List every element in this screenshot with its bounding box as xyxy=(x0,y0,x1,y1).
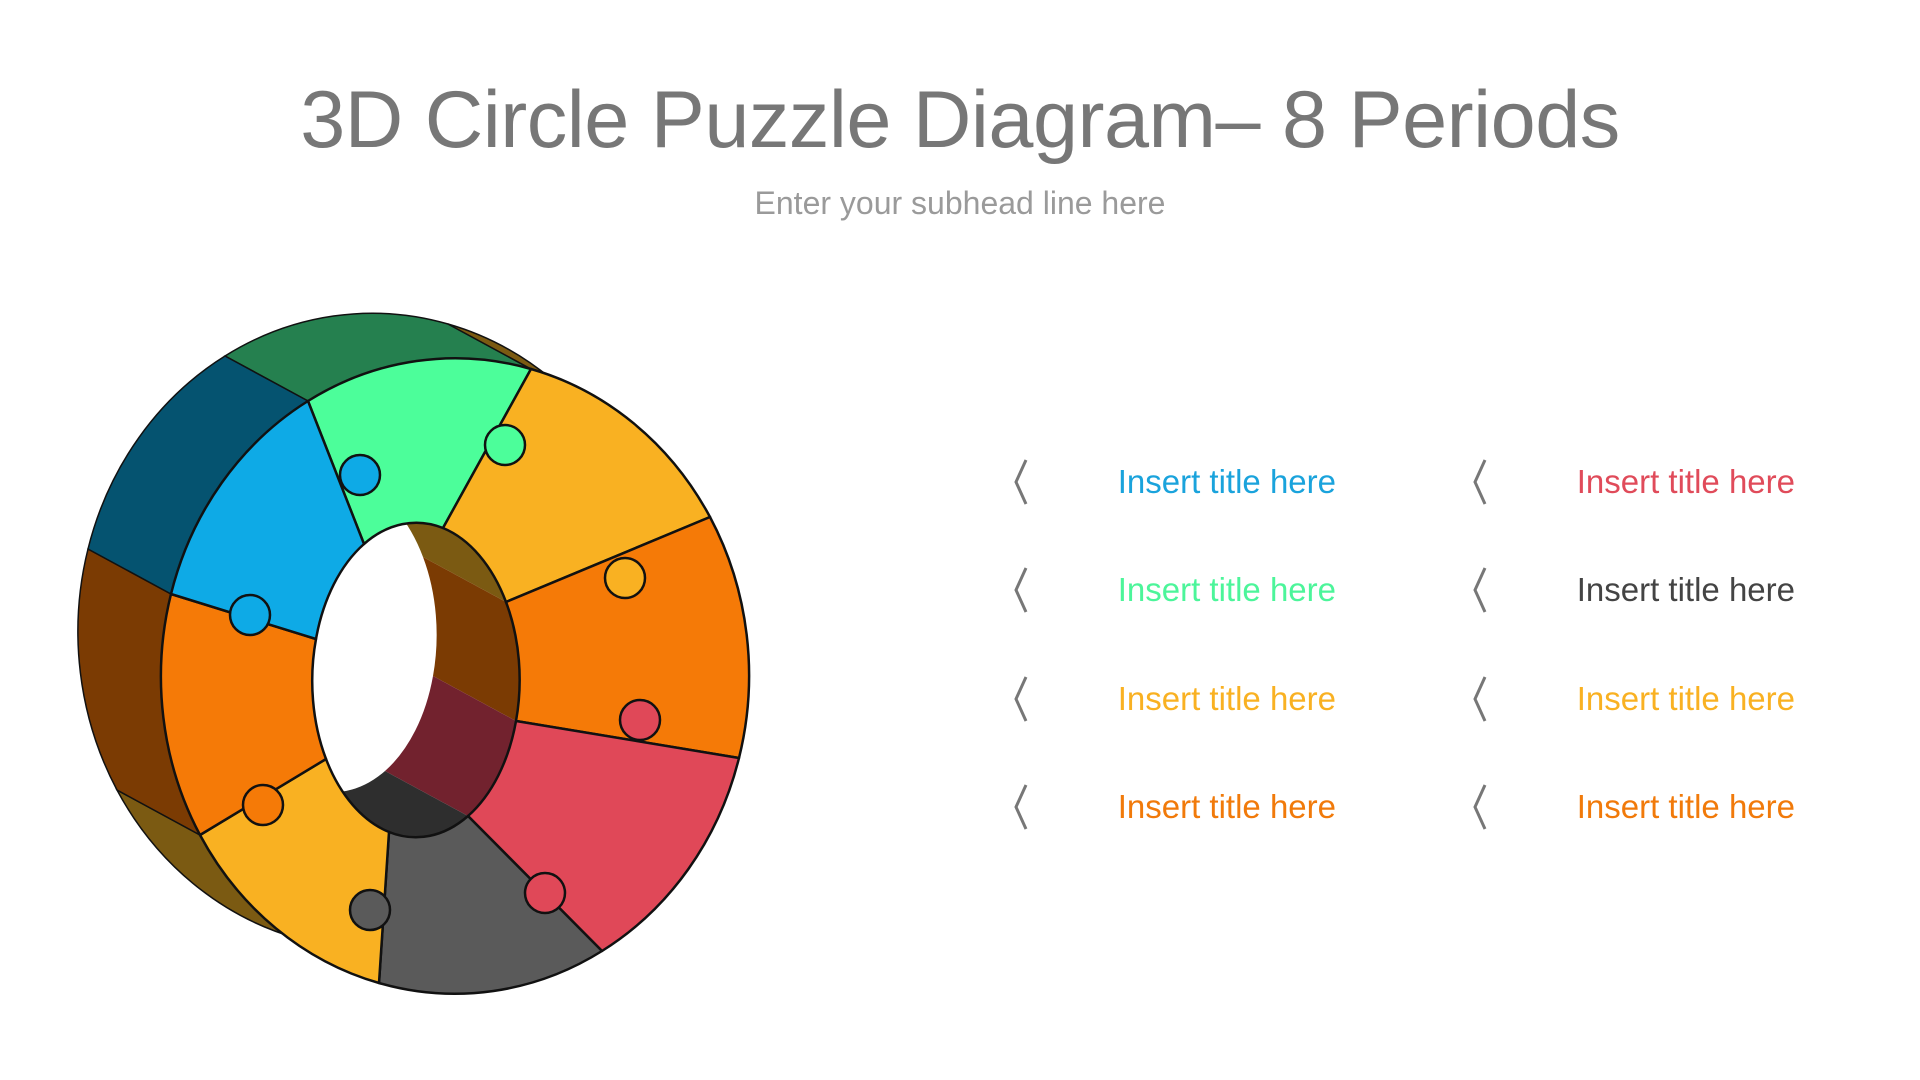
piece: orange right xyxy=(506,517,749,758)
piece: yellow bottom xyxy=(200,759,389,983)
item 6: Insert title here xyxy=(1577,571,1795,608)
piece: blue xyxy=(171,401,364,639)
piece: orange left xyxy=(161,594,326,835)
chevron xyxy=(1473,459,1486,505)
item 1 xyxy=(1014,459,1336,505)
puzzle knobs xyxy=(230,425,660,930)
outer sides xyxy=(78,313,749,994)
item 7: Insert title here xyxy=(1577,680,1795,717)
piece: yellow top xyxy=(443,369,710,602)
item 6 xyxy=(1473,567,1795,613)
item 5: Insert title here xyxy=(1577,463,1795,500)
item 8 xyxy=(1473,784,1795,830)
chevron xyxy=(1014,459,1028,505)
item 3: Insert title here xyxy=(1118,680,1336,717)
item 7 xyxy=(1473,676,1795,722)
inner sides xyxy=(229,478,520,837)
item 1: Insert title here xyxy=(1118,463,1336,500)
title: 3D Circle Puzzle Diagram– 8 Periods xyxy=(300,75,1620,165)
chevron xyxy=(1473,676,1486,722)
subhead: Enter your subhead line here xyxy=(755,185,1165,221)
piece: green xyxy=(308,358,531,544)
chevron xyxy=(1473,784,1486,830)
chevron xyxy=(1473,567,1486,613)
item 2: Insert title here xyxy=(1118,571,1336,608)
chevron xyxy=(1014,676,1028,722)
item 4 xyxy=(1014,784,1336,830)
chevron xyxy=(1014,567,1028,613)
chevron xyxy=(1014,784,1028,830)
item 8: Insert title here xyxy=(1577,788,1795,825)
piece: gray xyxy=(379,816,602,994)
item 5 xyxy=(1473,459,1795,505)
item 4: Insert title here xyxy=(1118,788,1336,825)
item 2 xyxy=(1014,567,1336,613)
piece: red xyxy=(468,721,739,951)
item 3 xyxy=(1014,676,1336,722)
front puzzle pieces xyxy=(161,358,749,994)
